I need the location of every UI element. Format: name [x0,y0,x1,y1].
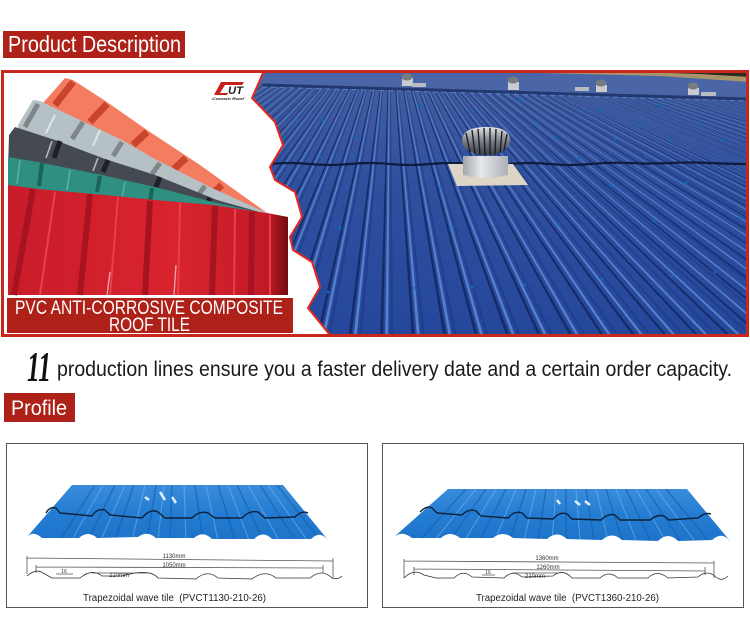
text: production lines statement: 11 [27,345,51,391]
upper seam [262,85,746,99]
diagram: profile dimensions 1130: 1050mm [162,563,186,569]
diagram: profile dimensions 1130: 16 [61,569,67,575]
heading: Profile [4,393,75,422]
icon: small roof vents [402,74,716,96]
lower seam [270,162,746,165]
diagram: profile dimensions 1130 [27,554,342,579]
text: production lines statement [27,345,732,391]
caption: tile model 1130: Trapezoidal wave tile (PVCT1130-210-26) [83,593,266,604]
diagram: profile dimensions 1360: 1260mm [536,565,560,571]
diagram: profile dimensions 1360: 16 [485,570,491,576]
diagram: profile dimensions 1130: 1130mm [163,554,185,560]
diagram: profile dimensions 1360: 210mm [525,574,545,580]
heading: Profile: Profile [11,397,67,420]
jagged red divider [252,73,330,335]
icon: blue wave tile 1360 [394,489,730,541]
diagram: profile dimensions 1130: 210mm [109,573,129,579]
icon: large turbine ventilator [448,127,528,186]
icon: roof screws [285,100,740,292]
caption: product name: PVC ANTI-CORROSIVE COMPOSITE [15,298,283,319]
icon: product tile stack [8,78,288,295]
caption: product name: ROOF TILE [109,315,190,336]
panel: product banner [1,70,749,337]
caption: tile model 1360: Trapezoidal wave tile (PVCT1360-210-26) [476,593,659,604]
icon: company logo [212,82,245,101]
photo: blue roof with ventilators [253,73,746,334]
heading: Product Description: Product Description [8,31,181,57]
panel: profile PVCT1360 [382,444,744,608]
icon: blue wave tile 1130 [27,485,328,540]
icon: company logo: Coowin Roof [212,97,245,101]
panel: profile PVCT1130 [6,444,368,608]
caption: product name [7,298,293,336]
diagram: profile dimensions 1360: 1360mm [535,556,559,562]
diagram: profile dimensions 1360 [404,556,728,580]
icon: company logo: UT [228,85,244,97]
banner border [2,72,748,336]
